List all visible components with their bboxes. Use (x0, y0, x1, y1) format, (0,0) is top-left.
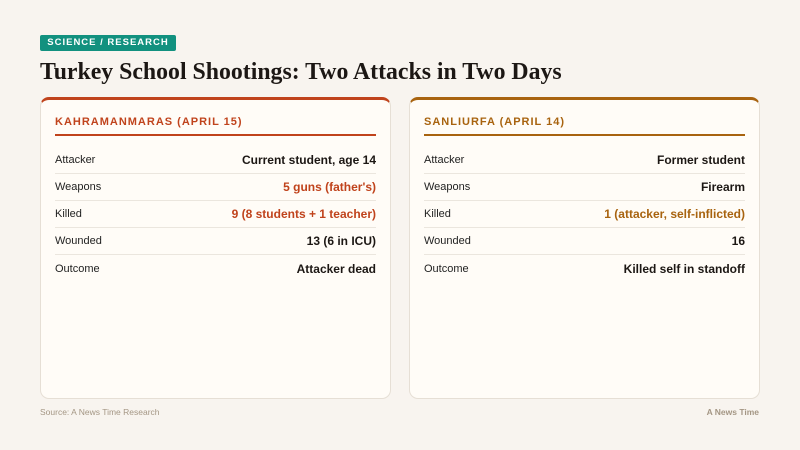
rows: Former student (657, 153, 745, 167)
rows: 1 (attacker, self-inflicted) (604, 207, 745, 221)
heading (55, 100, 376, 136)
rows: Wounded (424, 235, 471, 247)
rows: 13 (6 in ICU) (307, 234, 376, 248)
rows: Current student, age 14 (242, 153, 376, 167)
badge (40, 35, 176, 51)
heading: SANLIURFA (APRIL 14) (424, 116, 565, 128)
rows: 9 (8 students + 1 teacher) (232, 207, 376, 221)
rows: Attacker (55, 154, 95, 166)
rows: Killed (424, 208, 451, 220)
rows: Attacker dead (297, 262, 376, 276)
rows: Firearm (701, 180, 745, 194)
heading (424, 100, 745, 136)
panel: Kahramanmaras (40, 97, 391, 399)
heading: KAHRAMANMARAS (APRIL 15) (55, 116, 243, 128)
badge: SCIENCE / RESEARCH (47, 37, 169, 48)
brand: A News Time (707, 407, 759, 417)
rows (424, 153, 746, 276)
rows: Killed (55, 208, 82, 220)
rows: Killed self in standoff (624, 262, 745, 276)
rows: Outcome (55, 262, 100, 274)
rows: Weapons (55, 181, 101, 193)
rows: 16 (732, 234, 745, 248)
panel: Sanliurfa (409, 97, 760, 399)
rows: Weapons (424, 181, 470, 193)
rows: Attacker (424, 154, 464, 166)
rows: 5 guns (father's) (283, 180, 376, 194)
title: Turkey School Shootings: Two Attacks in Two Days (40, 59, 562, 85)
rows: Outcome (424, 262, 469, 274)
rows (55, 153, 376, 276)
source: Source: A News Time Research (40, 407, 160, 417)
rows: Wounded (55, 235, 102, 247)
